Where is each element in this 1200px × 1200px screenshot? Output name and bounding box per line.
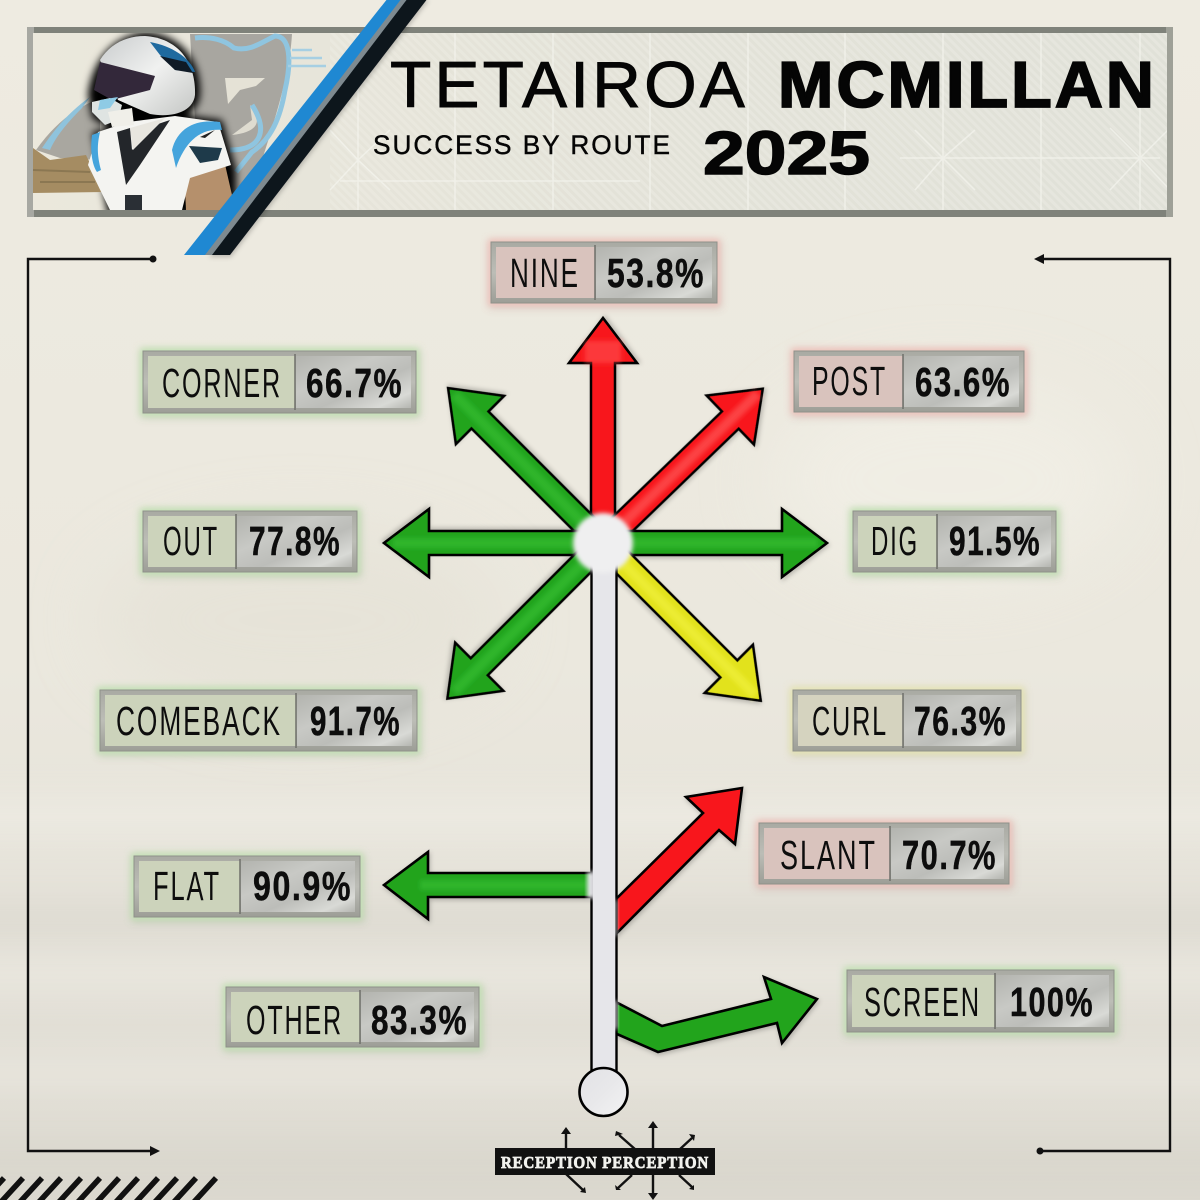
left bracket frame arrow: [28, 256, 160, 1156]
label: comeback: COMEBACK: [116, 698, 282, 744]
subtitle: success by route: SUCCESS BY ROUTE: [373, 130, 672, 160]
arrow: dig: [623, 509, 827, 577]
label: curl: 76.3%: [914, 698, 1007, 744]
reception perception logo: [495, 1121, 715, 1200]
year: 2025: [703, 119, 870, 187]
label: nine: NINE: [510, 250, 580, 296]
panther logo: [36, 34, 326, 196]
label: dig: DIG: [871, 518, 919, 564]
hub circle: [573, 513, 633, 573]
reception perception logo: RECEPTION PERCEPTION: [501, 1153, 709, 1172]
label: out: OUT: [163, 518, 219, 564]
label: flat: FLAT: [153, 863, 221, 909]
label: curl: CURL: [812, 698, 888, 744]
label: screen: [844, 967, 1117, 1035]
label: out: 77.8%: [249, 518, 341, 564]
label: post: [791, 348, 1027, 415]
label: comeback: 91.7%: [310, 698, 401, 744]
corner hatch stripes: [0, 1178, 216, 1200]
right bracket frame arrow: [1034, 254, 1170, 1154]
title: player name: MCMILLAN: [778, 48, 1157, 121]
label: flat: 90.9%: [253, 863, 352, 909]
jersey: [88, 116, 231, 210]
arrow: screen: [610, 977, 817, 1052]
label: flat: [131, 853, 363, 920]
arrow: corner: [424, 364, 613, 553]
helmet: [100, 36, 195, 115]
label: slant: 70.7%: [902, 832, 997, 878]
arrow: comeback: [423, 533, 613, 723]
label: curl: [790, 687, 1024, 754]
label: dig: [850, 508, 1059, 575]
header banner: [27, 27, 1173, 217]
right arm: [185, 166, 232, 210]
label: nine: 53.8%: [607, 250, 705, 296]
arrow: curl: [593, 533, 785, 725]
arrow: post: [594, 364, 786, 554]
label: slant: [756, 820, 1012, 887]
label: out: [140, 508, 360, 575]
label: nine: [488, 239, 720, 306]
arrow: out: [384, 509, 583, 577]
title: player name: TETAIROA: [390, 48, 748, 121]
label: other: 83.3%: [371, 997, 468, 1043]
arrow: flat: [384, 852, 594, 919]
start ball: [580, 1068, 628, 1116]
left arm: [33, 148, 104, 193]
label: other: [223, 984, 482, 1050]
label: corner: [140, 348, 419, 416]
diagonal stripe: team colours: [184, 0, 428, 255]
label: screen: SCREEN: [864, 979, 981, 1025]
label: corner: 66.7%: [306, 360, 403, 406]
label: post: 63.6%: [915, 359, 1011, 405]
label: post: POST: [812, 358, 887, 404]
label: screen: 100%: [1010, 979, 1094, 1025]
arrow: slant: [612, 788, 742, 938]
stem of route tree: [587, 555, 618, 1075]
label: other: OTHER: [246, 997, 343, 1043]
arrow: nine: [569, 318, 637, 523]
label: dig: 91.5%: [949, 518, 1041, 564]
label: corner: CORNER: [162, 360, 282, 406]
title: player name: [390, 48, 1157, 121]
player photo: [33, 32, 236, 215]
label: slant: SLANT: [780, 832, 877, 878]
route tree arrows: [384, 318, 827, 1116]
label: comeback: [97, 687, 420, 754]
